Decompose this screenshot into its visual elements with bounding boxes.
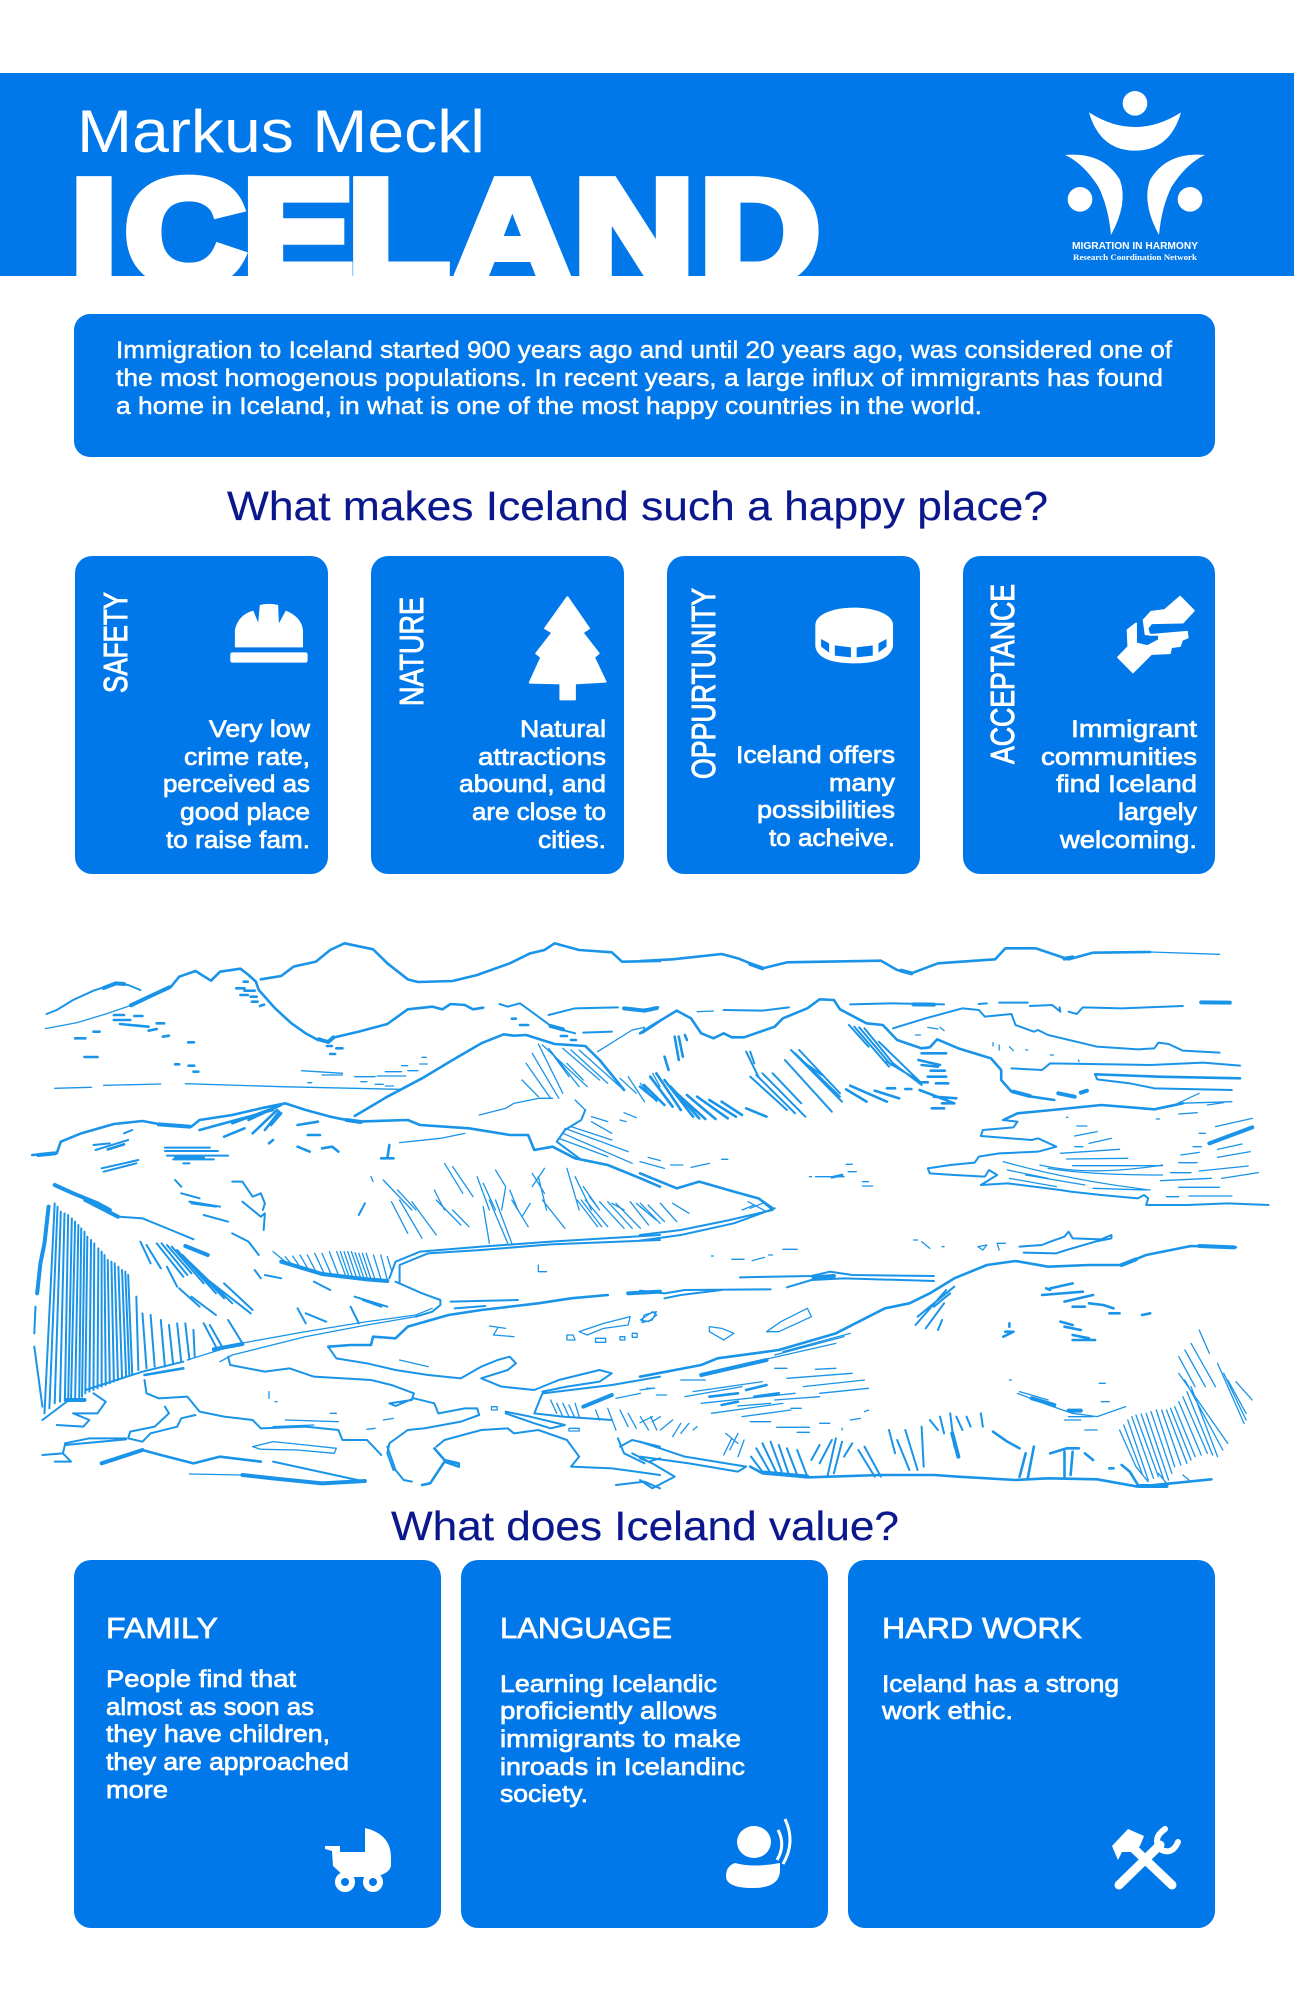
logo: Migration in Harmony: Research Coordination Network — [1073, 252, 1197, 262]
hard work text: work ethic. — [881, 1698, 1013, 1725]
panel: opportunity — [667, 556, 920, 874]
safety description: Very low — [209, 716, 311, 743]
heading: happy place: What makes Iceland such a happy place? — [227, 483, 1048, 529]
acceptance description: welcoming. — [1059, 827, 1197, 854]
opportunity description: possibilities — [757, 797, 895, 824]
opportunity description: to acheive. — [769, 825, 895, 852]
acceptance description: largely — [1118, 799, 1197, 826]
language text: inroads in Icelandinc — [500, 1754, 745, 1781]
title: ICELAND: ICELAND — [71, 150, 820, 315]
icon: person speaking — [726, 1819, 790, 1888]
label: nature: NATURE — [393, 597, 430, 706]
language heading: LANGUAGE — [500, 1613, 672, 1645]
safety description: crime rate, — [184, 744, 310, 771]
panel: hard work — [848, 1560, 1215, 1928]
hard work text: Iceland has a strong — [882, 1671, 1119, 1698]
panel: introduction: the most homogenous populations. In recent years, a large influx of immigrants has found — [116, 365, 1163, 392]
language text: immigrants to make — [500, 1726, 741, 1753]
header band — [0, 73, 1294, 315]
panel: acceptance — [963, 556, 1215, 874]
family heading: FAMILY — [106, 1613, 218, 1645]
safety description — [163, 716, 311, 854]
acceptance description: communities — [1041, 744, 1197, 771]
acceptance description — [1041, 716, 1197, 854]
safety description: perceived as — [163, 771, 310, 798]
label: acceptance: ACCEPTANCE — [984, 584, 1021, 764]
family text: they have children, — [106, 1721, 330, 1748]
logo: Migration in Harmony: MIGRATION IN HARMONY — [1072, 240, 1198, 252]
icon: pine tree — [530, 597, 605, 699]
icon: baby stroller — [325, 1828, 391, 1889]
language text — [500, 1671, 745, 1808]
icon: hammer and wrench — [1112, 1829, 1178, 1885]
panel: family — [74, 1560, 441, 1928]
nature description: Natural — [520, 716, 606, 743]
author name: Markus Meckl — [77, 98, 485, 165]
language text: society. — [500, 1781, 588, 1808]
label: opportunity: OPPURTUNITY — [685, 588, 722, 779]
family text — [106, 1666, 349, 1804]
nature description: abound, and — [459, 771, 606, 798]
icon: hard hat — [230, 604, 308, 663]
hard work text — [881, 1671, 1119, 1725]
panel: safety — [75, 556, 328, 874]
heading: values: What does Iceland value? — [391, 1503, 899, 1549]
family text: almost as soon as — [106, 1694, 314, 1721]
panel: nature — [371, 556, 624, 874]
opportunity description: Iceland offers — [736, 742, 895, 769]
safety description: to raise fam. — [166, 827, 310, 854]
landscape illustration of Icelandic fjords — [32, 943, 1269, 1488]
icon: coin — [815, 608, 893, 663]
panel: introduction — [74, 314, 1215, 457]
nature description: are close to — [472, 799, 606, 826]
panel: language — [461, 1560, 828, 1928]
acceptance description: Immigrant — [1071, 716, 1197, 743]
safety description: good place — [180, 799, 310, 826]
hard work heading: HARD WORK — [882, 1613, 1083, 1645]
family text: more — [106, 1777, 168, 1804]
language text: proficiently allows — [500, 1698, 717, 1725]
language text: Learning Icelandic — [500, 1671, 717, 1698]
acceptance description: find Iceland — [1056, 771, 1197, 798]
family text: People find that — [106, 1666, 296, 1693]
panel: introduction: Immigration to Iceland started 900 years ago and until 20 years ago, was considered one of — [116, 337, 1172, 364]
nature description: attractions — [478, 744, 606, 771]
nature description: cities. — [538, 827, 606, 854]
logo: Migration in Harmony — [1065, 91, 1205, 262]
opportunity description — [736, 742, 895, 852]
opportunity description: many — [829, 770, 895, 797]
family text: they are approached — [106, 1749, 349, 1776]
nature description — [459, 716, 606, 854]
icon: handshake — [1118, 597, 1194, 672]
panel: introduction: a home in Iceland, in what is one of the most happy countries in the world. — [116, 393, 982, 420]
label: safety: SAFETY — [97, 592, 134, 693]
